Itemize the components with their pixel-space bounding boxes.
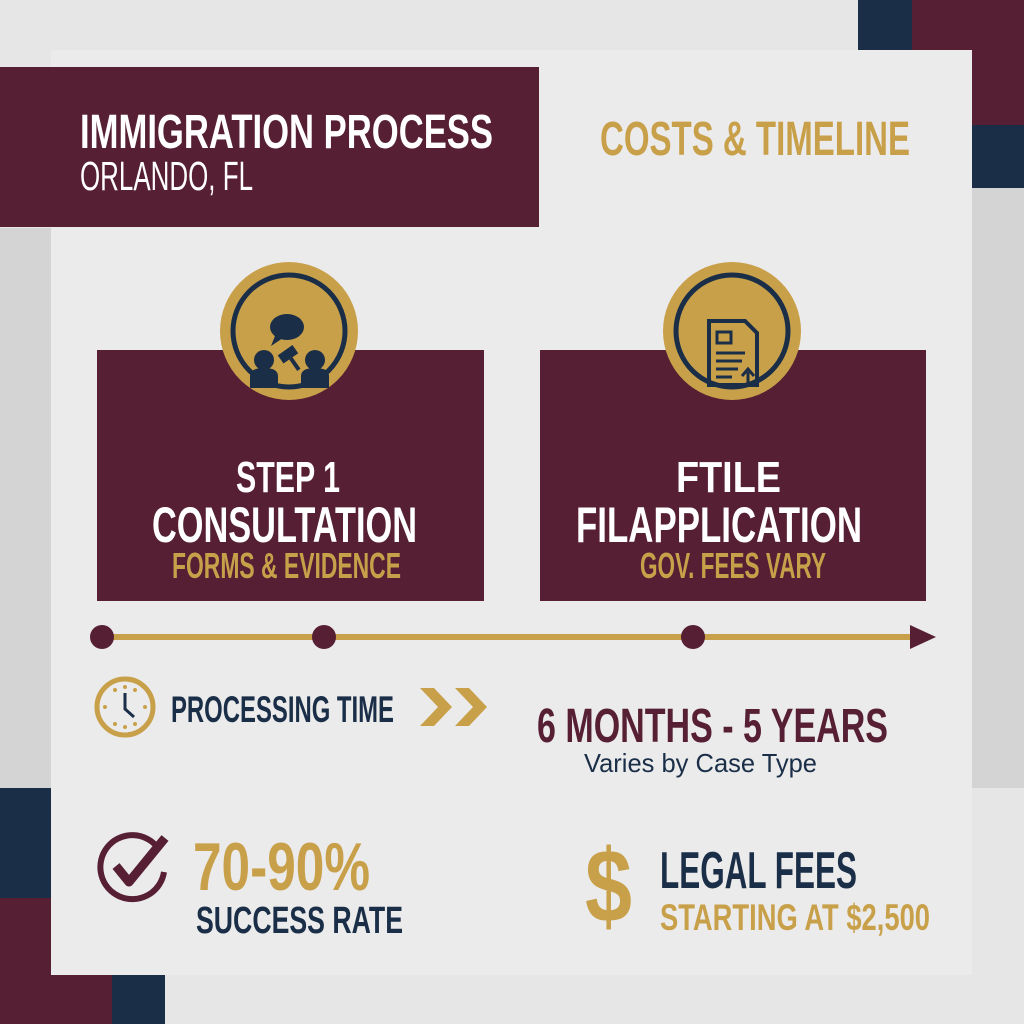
processing range: 6 MONTHS - 5 YEARS — [537, 700, 888, 753]
icon: chevrons — [420, 688, 487, 726]
card: file application — [540, 350, 926, 601]
processing time label: PROCESSING TIME — [171, 689, 394, 730]
icon: document — [663, 262, 801, 400]
side strips — [0, 188, 1024, 790]
icon: consultation — [220, 262, 358, 400]
corner blocks top right — [858, 0, 1024, 188]
success rate: 70-90% — [193, 829, 370, 905]
card: file application: FILAPPLICATION — [576, 497, 862, 553]
card: step 1: CONSULTATION — [152, 497, 417, 553]
title: IMMIGRATION PROCESS — [80, 106, 493, 159]
processing range — [537, 700, 888, 778]
legal fees: LEGAL FEES — [660, 842, 857, 900]
icon: dollar: $ — [585, 829, 632, 945]
success rate — [193, 829, 403, 942]
timeline arrow — [90, 625, 936, 649]
legal fees: STARTING AT $2,500 — [660, 897, 930, 938]
card: file application: GOV. FEES VARY — [640, 545, 826, 586]
card: step 1: STEP 1 — [236, 453, 340, 502]
icon: check — [100, 835, 165, 899]
header box — [0, 67, 539, 227]
card: step 1 — [97, 350, 484, 601]
icon: clock — [97, 679, 153, 735]
legal fees — [660, 842, 930, 938]
card: step 1: FORMS & EVIDENCE — [172, 545, 401, 586]
card: file application: FTILE — [676, 453, 781, 502]
processing range: Varies by Case Type — [584, 748, 817, 778]
success rate: SUCCESS RATE — [196, 900, 403, 942]
subtitle: ORLANDO, FL — [80, 153, 253, 199]
corner blocks bottom left — [0, 788, 165, 1024]
